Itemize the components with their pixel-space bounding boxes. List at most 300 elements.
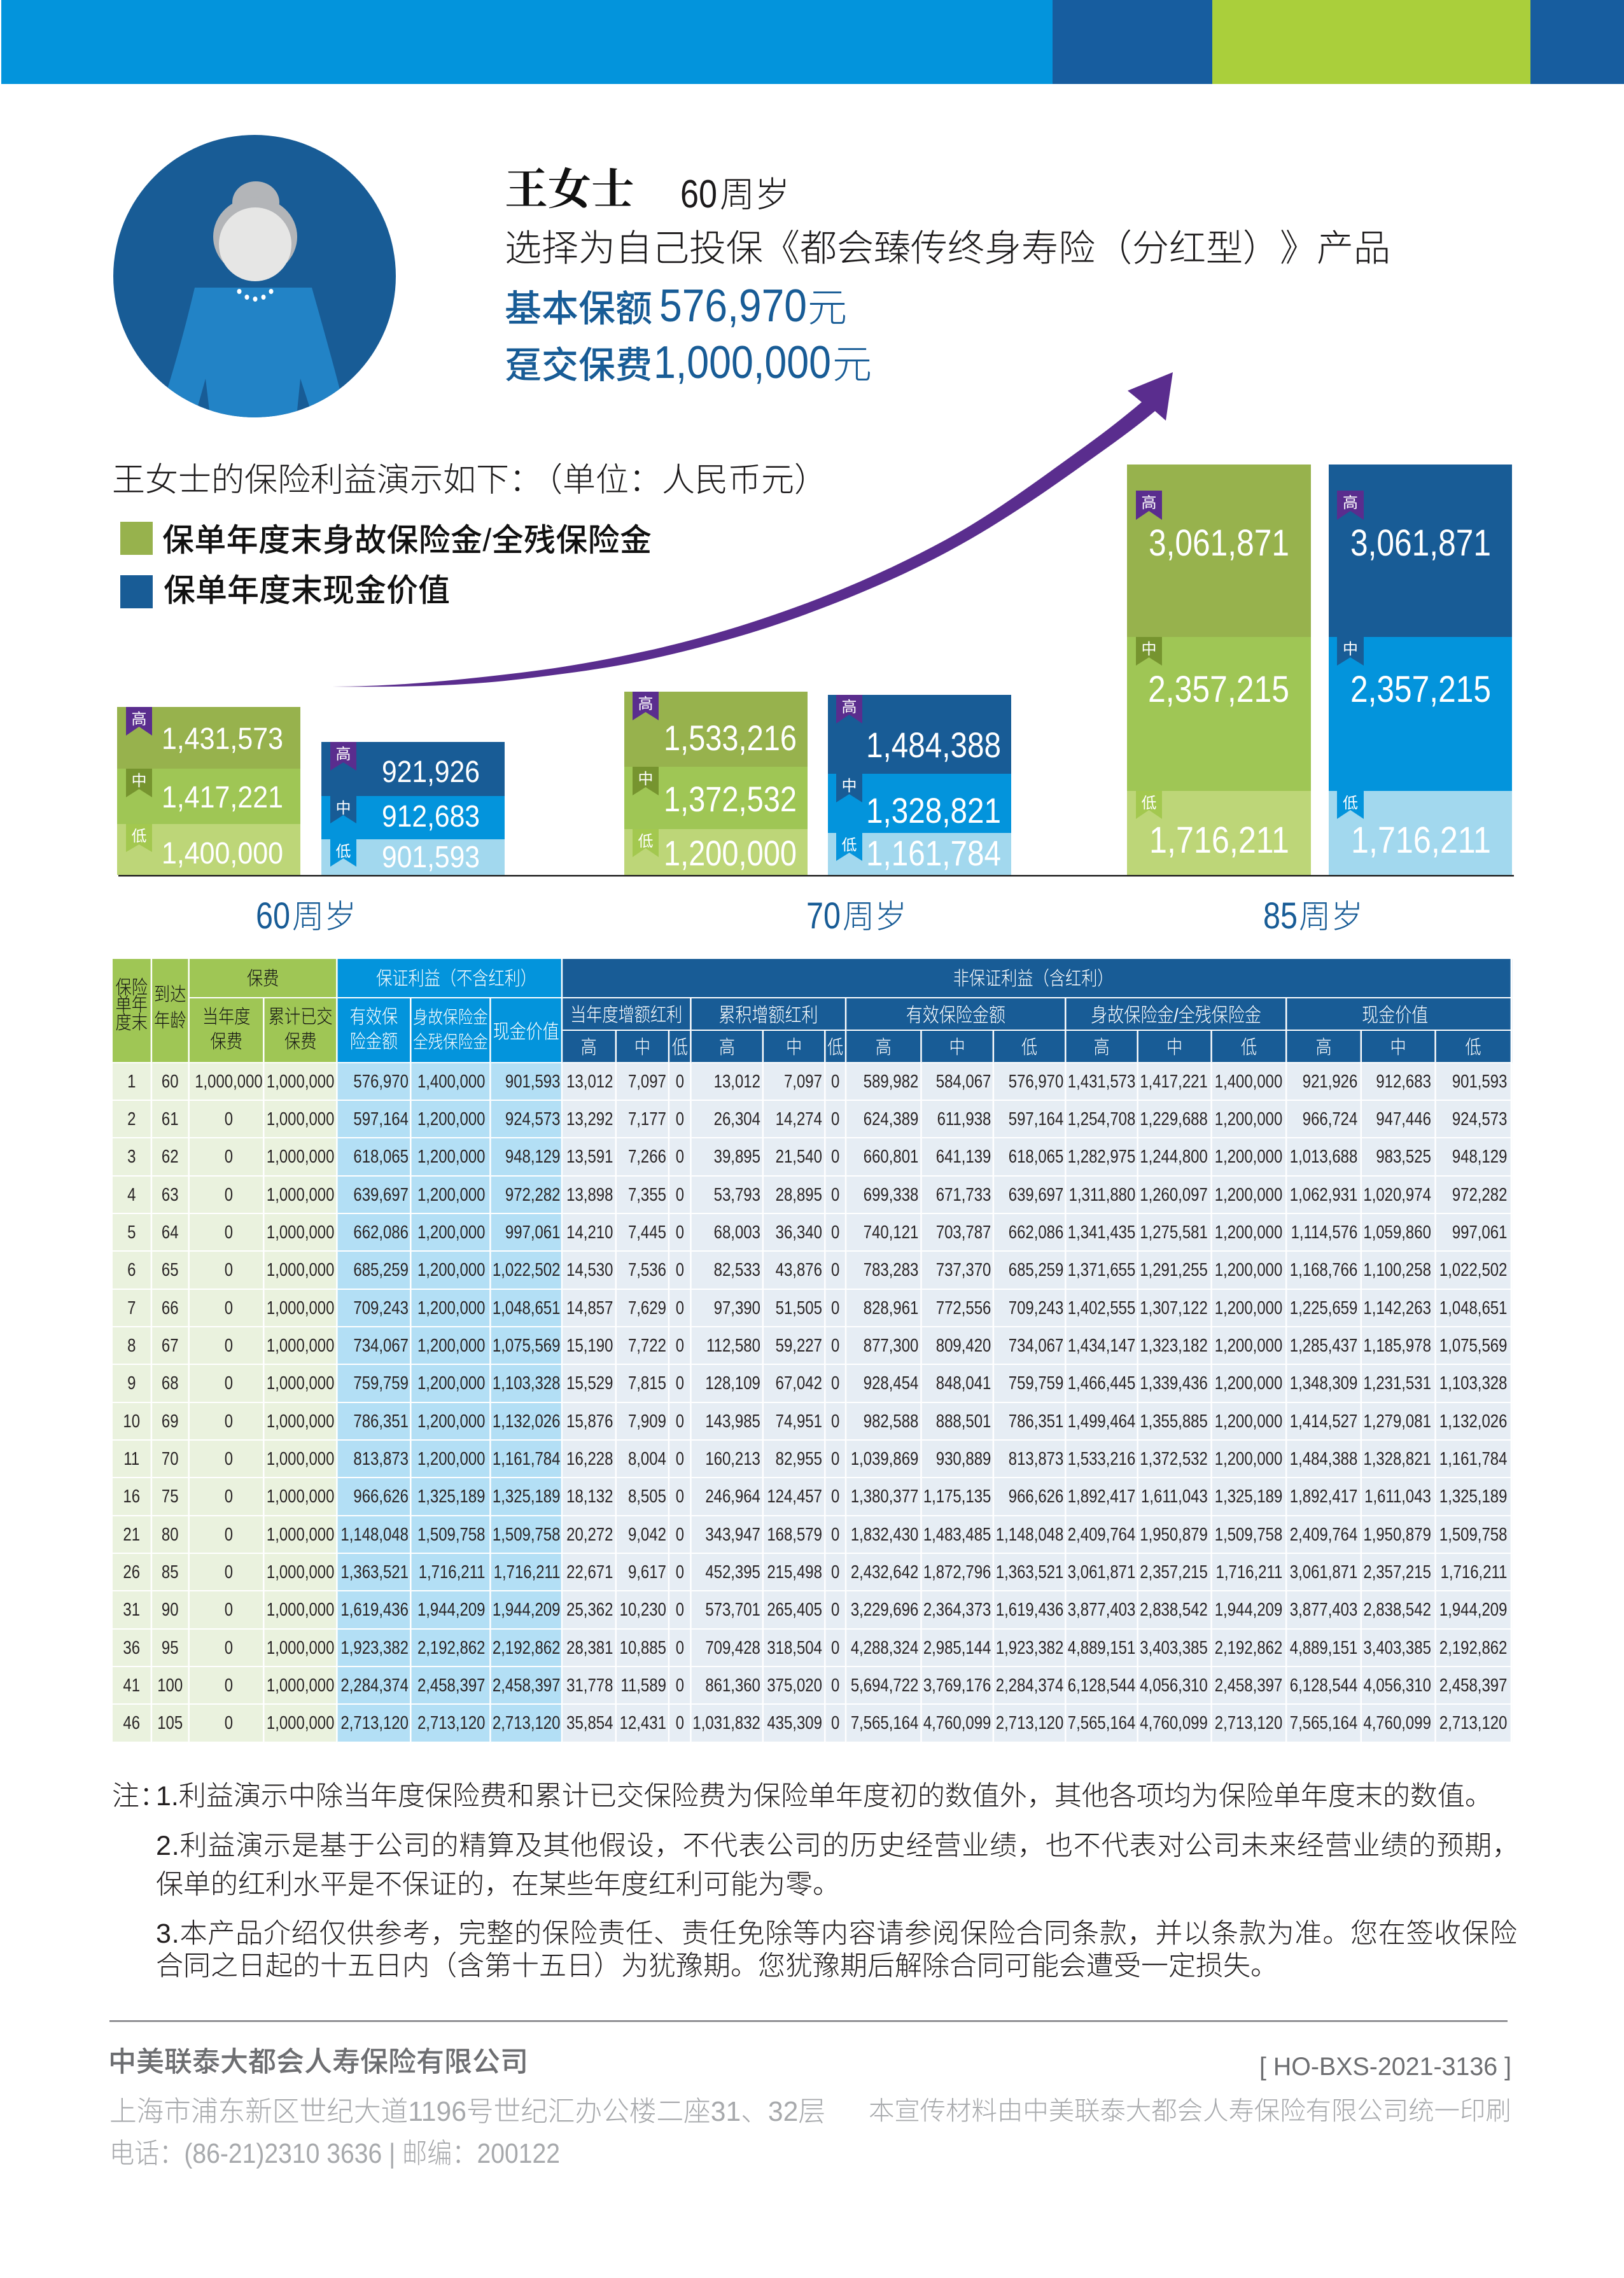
table: benefit illustration: 82,533	[714, 1260, 760, 1280]
table: benefit illustration: 8,505	[628, 1486, 666, 1507]
table: benefit illustration: 2,284,374	[996, 1675, 1063, 1696]
text: basic sum insured: 元	[808, 286, 847, 330]
table: benefit illustration: 到达	[154, 984, 186, 1005]
table: benefit illustration: 597,164	[353, 1109, 409, 1129]
table: benefit illustration: 28,381	[566, 1638, 613, 1658]
table: benefit illustration: 1,200,000	[1215, 1147, 1282, 1167]
table: benefit illustration: 0	[676, 1147, 684, 1167]
table: benefit illustration: 6	[127, 1260, 136, 1280]
table: benefit illustration: 5,694,722	[851, 1675, 918, 1696]
bar: age 60 cash value	[321, 742, 505, 875]
table: benefit illustration: 7,722	[628, 1336, 666, 1356]
table: benefit illustration: 0	[225, 1298, 233, 1318]
table: benefit illustration: 618,065	[1009, 1147, 1063, 1167]
table: benefit illustration: 18,132	[566, 1486, 613, 1507]
table: benefit illustration: 21,540	[776, 1147, 822, 1167]
table: benefit illustration: 2,432,642	[851, 1562, 918, 1583]
table: benefit illustration: 1,509,758	[417, 1525, 485, 1545]
notes	[112, 1781, 1520, 1981]
table: benefit illustration: 1,103,328	[493, 1373, 560, 1394]
table: benefit illustration: 74,951	[776, 1411, 822, 1432]
text: single premium	[505, 337, 872, 388]
table: benefit illustration: 0	[676, 1260, 684, 1280]
table: benefit illustration: 584,067	[936, 1072, 991, 1092]
table: benefit illustration: 保费	[247, 968, 279, 989]
bar: age 85 cash value: 高	[1343, 494, 1358, 512]
arrow: growth curve	[332, 372, 1173, 687]
table: benefit illustration: 1,000,000	[267, 1449, 334, 1469]
table: benefit illustration: 度末	[116, 1012, 148, 1033]
table: benefit illustration: 318,504	[767, 1638, 822, 1658]
table: benefit illustration: 1,325,189	[1215, 1486, 1282, 1507]
table: benefit illustration: 累积增额红利	[718, 1004, 818, 1026]
table: benefit illustration: 0	[225, 1638, 233, 1658]
table: benefit illustration: 险金额	[350, 1031, 398, 1052]
table: benefit illustration: 1,000,000	[267, 1373, 334, 1394]
table: benefit illustration: 997,061	[505, 1222, 560, 1243]
table: benefit illustration: 7,266	[628, 1147, 666, 1167]
table: benefit illustration: 1,100,258	[1363, 1260, 1431, 1280]
table: benefit illustration: 1,509,758	[1439, 1525, 1507, 1545]
text: product selection: 选择为自己投保《都会臻传终身寿险（分红型）》产品	[505, 228, 1390, 269]
table: benefit illustration: 75	[162, 1486, 179, 1507]
table: benefit illustration: 1,611,043	[1364, 1486, 1431, 1507]
table: benefit illustration: 46	[123, 1713, 140, 1733]
table: benefit illustration: 1,892,417	[1068, 1486, 1135, 1507]
table: benefit illustration: 1,020,974	[1363, 1185, 1431, 1205]
table: benefit illustration: 6,128,544	[1068, 1675, 1135, 1696]
axis label: age 85: 周岁	[1299, 898, 1363, 935]
table: benefit illustration: 7,565,164	[1068, 1713, 1135, 1733]
table: benefit illustration: 1,372,532	[1140, 1449, 1208, 1469]
table: benefit illustration: 0	[225, 1449, 233, 1469]
table: benefit illustration: 848,041	[936, 1373, 991, 1394]
table: benefit illustration: 身故保险金	[413, 1007, 488, 1027]
table: benefit illustration: 低	[1241, 1037, 1257, 1058]
bar: age 60 death benefit: 1,400,000	[162, 837, 283, 870]
table: benefit illustration: 709,243	[1009, 1298, 1063, 1318]
table: benefit illustration: 0	[225, 1109, 233, 1129]
table: benefit illustration: 1,311,880	[1069, 1185, 1135, 1205]
heading: benefit illustration: 王女士的保险利益演示如下：	[112, 462, 542, 499]
table: benefit illustration: 4,760,099	[1140, 1713, 1208, 1733]
table: benefit illustration: 105	[157, 1713, 183, 1733]
table: benefit illustration: 4,056,310	[1363, 1675, 1431, 1696]
table: benefit illustration: 143,985	[705, 1411, 760, 1432]
table: benefit illustration: 0	[831, 1600, 839, 1620]
table: benefit illustration: 912,683	[1376, 1072, 1431, 1092]
table: benefit illustration: 1,185,978	[1363, 1336, 1431, 1356]
table: benefit illustration: 31,778	[566, 1675, 613, 1696]
table: benefit illustration: 0	[676, 1222, 684, 1243]
table: benefit illustration: 1,000,000	[267, 1600, 334, 1620]
table: benefit illustration: 1,431,573	[1068, 1072, 1135, 1092]
table: benefit illustration: 3,061,871	[1068, 1562, 1135, 1583]
table: benefit illustration: 7,565,164	[851, 1713, 918, 1733]
table: benefit illustration: 全残保险金	[413, 1032, 488, 1052]
table: benefit illustration: 589,982	[864, 1072, 918, 1092]
table: benefit illustration: 1,279,081	[1363, 1411, 1431, 1432]
table: benefit illustration: 1,414,527	[1290, 1411, 1357, 1432]
table: benefit illustration: 7,629	[628, 1298, 666, 1318]
table: benefit illustration: 67,042	[776, 1373, 822, 1394]
table: benefit illustration: 734,067	[1009, 1336, 1063, 1356]
table: benefit illustration: 671,733	[936, 1185, 991, 1205]
table: benefit illustration: 保险	[116, 977, 148, 998]
table: benefit illustration: 343,947	[705, 1525, 760, 1545]
table: benefit illustration: 100	[157, 1675, 183, 1696]
table: benefit illustration: 2,458,397	[493, 1675, 560, 1696]
table: benefit illustration: 1,355,885	[1140, 1411, 1208, 1432]
table: benefit illustration: 单年	[116, 995, 148, 1016]
table: benefit illustration: 1,944,209	[493, 1600, 560, 1620]
table: benefit illustration: 759,759	[1009, 1373, 1063, 1394]
table: benefit illustration: 68	[162, 1373, 179, 1394]
notes: 合同之日起的十五日内（含第十五日）为犹豫期。您犹豫期后解除合同可能会遭受一定损失。	[156, 1951, 1278, 1981]
table: benefit illustration: 639,697	[353, 1185, 409, 1205]
table: benefit illustration: 3	[127, 1147, 136, 1167]
table: benefit illustration: 2	[127, 1109, 136, 1129]
table: benefit illustration: 11,589	[620, 1675, 666, 1696]
table: benefit illustration: 888,501	[936, 1411, 991, 1432]
footer: company name: 中美联泰大都会人寿保险有限公司	[108, 2046, 528, 2078]
table: benefit illustration: 1,484,388	[1290, 1449, 1357, 1469]
table: benefit illustration: 1,103,328	[1439, 1373, 1507, 1394]
table: benefit illustration: 12,431	[620, 1713, 666, 1733]
table: benefit illustration: 0	[676, 1638, 684, 1658]
table: benefit illustration: 非保证利益（含红利）	[953, 968, 1114, 989]
table: benefit illustration: 928,454	[864, 1373, 918, 1394]
table: benefit illustration: 1,000,000	[267, 1147, 334, 1167]
table: benefit illustration: 1,161,784	[1439, 1449, 1507, 1469]
table: benefit illustration: 7,909	[628, 1411, 666, 1432]
table: benefit illustration: 20,272	[566, 1525, 613, 1545]
table: benefit illustration: 709,243	[353, 1298, 409, 1318]
table: benefit illustration: 21	[123, 1525, 140, 1545]
heading: benefit illustration: 人民币元）	[662, 462, 827, 499]
table: benefit illustration: 保费	[284, 1031, 316, 1052]
table: benefit illustration: 0	[676, 1562, 684, 1583]
table: benefit illustration: 9	[127, 1373, 136, 1394]
table: benefit illustration: 1,000,000	[267, 1525, 334, 1545]
table: benefit illustration: 25,362	[566, 1600, 613, 1620]
table: benefit illustration: 0	[225, 1675, 233, 1696]
table: benefit illustration: 0	[676, 1336, 684, 1356]
table: benefit illustration: 7,565,164	[1290, 1713, 1357, 1733]
table: benefit illustration: 7,355	[628, 1185, 666, 1205]
table: benefit illustration: 1,611,043	[1141, 1486, 1208, 1507]
table: benefit illustration: 2,284,374	[340, 1675, 409, 1696]
table: benefit illustration: 0	[676, 1072, 684, 1092]
bar: age 85 cash value	[1329, 465, 1512, 876]
table: benefit illustration: 265,405	[767, 1600, 822, 1620]
table: benefit illustration: 2,985,144	[923, 1638, 991, 1658]
table: benefit illustration: 90	[162, 1600, 179, 1620]
table: benefit illustration: 16,228	[566, 1449, 613, 1469]
table: benefit illustration: 14,210	[566, 1222, 613, 1243]
table: benefit illustration: 877,300	[864, 1336, 918, 1356]
table: benefit illustration: 1,039,869	[851, 1449, 918, 1469]
table: benefit illustration: 1,380,377	[851, 1486, 918, 1507]
table: benefit illustration: 53,793	[714, 1185, 760, 1205]
table: benefit illustration: 1,200,000	[1215, 1109, 1282, 1129]
table: benefit illustration: 15,190	[566, 1336, 613, 1356]
bar: age 70 cash value	[828, 695, 1011, 875]
table: benefit illustration: 62	[162, 1147, 179, 1167]
table: benefit illustration: 10	[123, 1411, 140, 1432]
table: benefit illustration: 15,876	[566, 1411, 613, 1432]
table: benefit illustration: 10,230	[620, 1600, 666, 1620]
table: benefit illustration: 1,200,000	[1215, 1185, 1282, 1205]
table: benefit illustration: 1,339,436	[1140, 1373, 1208, 1394]
table: benefit illustration: 662,086	[353, 1222, 409, 1243]
table: benefit illustration: 0	[831, 1713, 839, 1733]
notes: 保单的红利水平是不保证的，在某些年度红利可能为零。	[156, 1869, 840, 1900]
bar: age 85 cash value: 1,716,211	[1351, 820, 1491, 861]
table: benefit illustration: 1,923,382	[340, 1638, 409, 1658]
table: benefit illustration: 639,697	[1009, 1185, 1063, 1205]
table: benefit illustration: 1,363,521	[996, 1562, 1063, 1583]
bar: age 60 death benefit: 1,417,221	[162, 781, 283, 814]
table: benefit illustration: 809,420	[936, 1336, 991, 1356]
table: benefit illustration: 930,889	[936, 1449, 991, 1469]
table: benefit illustration: 2,458,397	[1215, 1675, 1282, 1696]
table: benefit illustration: 13,898	[566, 1185, 613, 1205]
table: benefit illustration: 3,877,403	[1290, 1600, 1357, 1620]
table: benefit illustration: 786,351	[353, 1411, 409, 1432]
table: benefit illustration: 0	[831, 1298, 839, 1318]
bar: age 85 death benefit: 中	[1142, 641, 1157, 658]
table: benefit illustration: 573,701	[705, 1600, 760, 1620]
axis label: age 60	[256, 895, 356, 937]
table: benefit illustration: 36,340	[776, 1222, 822, 1243]
table: benefit illustration: 0	[676, 1486, 684, 1507]
table: benefit illustration: 中	[1390, 1037, 1406, 1058]
table: benefit illustration: 43,876	[776, 1260, 822, 1280]
table: benefit illustration: 3,403,385	[1363, 1638, 1431, 1658]
table: benefit illustration: 1,716,211	[494, 1562, 560, 1583]
table: benefit illustration: 0	[831, 1562, 839, 1583]
table: benefit illustration: 4,288,324	[851, 1638, 918, 1658]
table: benefit illustration: 1,325,189	[493, 1486, 560, 1507]
table: benefit illustration: 0	[831, 1411, 839, 1432]
bar: age 85 death benefit: 低	[1142, 795, 1157, 812]
table: benefit illustration: 1,200,000	[1215, 1373, 1282, 1394]
table: benefit illustration: 1,872,796	[923, 1562, 991, 1583]
table: benefit illustration: 861,360	[705, 1675, 760, 1696]
table: benefit illustration: 4,760,099	[923, 1713, 991, 1733]
table: benefit illustration: 3,229,696	[851, 1600, 918, 1620]
table: benefit illustration: 1,499,464	[1068, 1411, 1135, 1432]
table: benefit illustration: 921,926	[1303, 1072, 1357, 1092]
table: benefit illustration: 1,142,263	[1363, 1298, 1431, 1318]
table: benefit illustration: 1,000,000	[267, 1298, 334, 1318]
table: benefit illustration: 13,012	[566, 1072, 613, 1092]
table: benefit illustration: 70	[162, 1449, 179, 1469]
table: benefit illustration: 身故保险金/全残保险金	[1091, 1004, 1261, 1026]
table: benefit illustration: 1,000,000	[267, 1713, 334, 1733]
table: benefit illustration: 0	[831, 1260, 839, 1280]
table: benefit illustration: 51,505	[776, 1298, 822, 1318]
axis label: age 70	[806, 895, 907, 937]
bar: age 70 cash value: 中	[841, 778, 857, 795]
bar: age 60 cash value: 高	[336, 746, 351, 763]
table: benefit illustration: 1,000,000	[267, 1675, 334, 1696]
table: benefit illustration: 660,801	[864, 1147, 918, 1167]
footer: print statement: 本宣传材料由中美联泰大都会人寿保险有限公司统一印刷	[869, 2096, 1511, 2125]
table: benefit illustration: 有效保险金额	[906, 1004, 1005, 1026]
table: benefit illustration: 597,164	[1009, 1109, 1063, 1129]
table: benefit illustration: 947,446	[1376, 1109, 1431, 1129]
table: benefit illustration: 11	[123, 1449, 139, 1469]
table: benefit illustration: 4,056,310	[1140, 1675, 1208, 1696]
table: benefit illustration: 0	[225, 1713, 233, 1733]
table: benefit illustration: 1,175,135	[923, 1486, 991, 1507]
table: benefit illustration: 2,838,542	[1140, 1600, 1208, 1620]
table: benefit illustration: 1,000,000	[267, 1185, 334, 1205]
bar: age 70 cash value: 1,484,388	[866, 725, 1001, 765]
table: benefit illustration: 1,619,436	[340, 1600, 409, 1620]
table: benefit illustration: 2,192,862	[417, 1638, 485, 1658]
table: benefit illustration: 当年度增额红利	[570, 1004, 682, 1026]
table: benefit illustration: 13,591	[566, 1147, 613, 1167]
table: benefit illustration: 0	[831, 1072, 839, 1092]
table: benefit illustration: 现金价值	[1362, 1004, 1428, 1026]
bar: age 60 cash value: 中	[336, 800, 351, 817]
table: benefit illustration: 709,428	[705, 1638, 760, 1658]
table: benefit illustration: 60	[162, 1072, 179, 1092]
table: benefit illustration: 1,716,211	[1216, 1562, 1282, 1583]
table: benefit illustration: 1,132,026	[493, 1411, 560, 1432]
table: benefit illustration: 924,573	[1452, 1109, 1507, 1129]
legend: death benefit: 保单年度末身故保险金/全残保险金	[162, 522, 652, 558]
table: benefit illustration: 1,533,216	[1068, 1449, 1135, 1469]
table: benefit illustration: 982,588	[864, 1411, 918, 1432]
table: benefit illustration: 1,168,766	[1290, 1260, 1357, 1280]
table: benefit illustration: 0	[676, 1675, 684, 1696]
table: benefit illustration: 中	[949, 1037, 965, 1058]
table: benefit illustration: 4,889,151	[1290, 1638, 1357, 1658]
table: benefit illustration: 1,402,555	[1068, 1298, 1135, 1318]
table: benefit illustration: 年龄	[154, 1010, 186, 1031]
table: benefit illustration: 0	[831, 1185, 839, 1205]
table: benefit illustration: 低	[1466, 1037, 1481, 1058]
table: benefit illustration: 685,259	[353, 1260, 409, 1280]
table: benefit illustration: 累计已交	[269, 1007, 333, 1028]
table: benefit illustration: 1,923,382	[996, 1638, 1063, 1658]
bar: age 60 cash value: 912,683	[382, 800, 480, 834]
table: benefit illustration: 1,200,000	[417, 1260, 485, 1280]
table: benefit illustration: 1,254,708	[1068, 1109, 1135, 1129]
axis label: age 70: 70	[806, 895, 841, 937]
table: benefit illustration: 1,000,000	[195, 1072, 263, 1092]
bar: age 85 death benefit: 高	[1142, 494, 1157, 512]
bar: age 85 death benefit: 2,357,215	[1148, 669, 1289, 710]
table: benefit illustration: 0	[225, 1222, 233, 1243]
notes: 注：	[112, 1781, 167, 1812]
table: benefit illustration: 4,760,099	[1363, 1713, 1431, 1733]
table: benefit illustration: 1,200,000	[1215, 1260, 1282, 1280]
table: benefit illustration: 624,389	[864, 1109, 918, 1129]
table: benefit illustration: 2,713,120	[417, 1713, 485, 1733]
table: benefit illustration: 948,129	[1452, 1147, 1507, 1167]
table: benefit illustration: 1,013,688	[1290, 1147, 1357, 1167]
bar: age 60 cash value: 901,593	[382, 841, 480, 874]
table: benefit illustration: 0	[831, 1525, 839, 1545]
table: benefit illustration: 1,132,026	[1439, 1411, 1507, 1432]
table: benefit illustration: 41	[123, 1675, 140, 1696]
table: benefit illustration: 948,129	[505, 1147, 560, 1167]
table: benefit illustration: 中	[634, 1037, 650, 1058]
table: benefit illustration: 14,530	[566, 1260, 613, 1280]
footer: document code: [ HO-BXS-2021-3136 ]	[1259, 2053, 1511, 2081]
table: benefit illustration: 1,000,000	[267, 1336, 334, 1356]
table: benefit illustration: 0	[831, 1486, 839, 1507]
heading: customer name and age: 王女士	[505, 165, 634, 214]
table: benefit illustration: 1,000,000	[267, 1486, 334, 1507]
table: benefit illustration: 2,713,120	[493, 1713, 560, 1733]
bar: age 60 death benefit: 低	[131, 828, 146, 845]
table: benefit illustration: 1,244,800	[1140, 1147, 1208, 1167]
table: benefit illustration: 1,417,221	[1140, 1072, 1208, 1092]
table: benefit illustration: 1,022,502	[1439, 1260, 1507, 1280]
table: benefit illustration: 0	[676, 1185, 684, 1205]
table: benefit illustration: 0	[225, 1486, 233, 1507]
table: benefit illustration: 1,509,758	[493, 1525, 560, 1545]
table: benefit illustration: 1,950,879	[1363, 1525, 1431, 1545]
table: benefit illustration: 2,458,397	[1439, 1675, 1507, 1696]
table: benefit illustration: 1,022,502	[493, 1260, 560, 1280]
table: benefit illustration: 0	[676, 1411, 684, 1432]
table: benefit illustration: 中	[1166, 1037, 1182, 1058]
table: benefit illustration: 5	[127, 1222, 136, 1243]
table: benefit illustration: 1,509,758	[1215, 1525, 1282, 1545]
table: benefit illustration: 1,200,000	[1215, 1222, 1282, 1243]
table: benefit illustration: 828,961	[864, 1298, 918, 1318]
table: benefit illustration: 452,395	[705, 1562, 760, 1583]
table: benefit illustration: 低	[672, 1037, 688, 1058]
table: benefit illustration: 924,573	[505, 1109, 560, 1129]
table: benefit illustration: 6,128,544	[1290, 1675, 1357, 1696]
top colour band	[1, 0, 1624, 84]
table: benefit illustration: 有效保	[350, 1007, 398, 1028]
table: benefit illustration: 699,338	[864, 1185, 918, 1205]
table: benefit illustration: 901,593	[505, 1072, 560, 1092]
table: benefit illustration: 1,200,000	[417, 1411, 485, 1432]
table: benefit illustration: 1,944,209	[1439, 1600, 1507, 1620]
table: benefit illustration: 0	[225, 1600, 233, 1620]
table: benefit illustration: 4	[127, 1185, 136, 1205]
table: benefit illustration: 1,716,211	[1441, 1562, 1507, 1583]
table: benefit illustration: 1,231,531	[1363, 1373, 1431, 1394]
table: benefit illustration: 1,031,832	[692, 1713, 760, 1733]
table: benefit illustration: 997,061	[1452, 1222, 1507, 1243]
axis label: age 60: 60	[256, 895, 290, 937]
table: benefit illustration: 7	[127, 1298, 136, 1318]
axis label: age 85	[1263, 895, 1363, 937]
table: benefit illustration: 低	[827, 1037, 843, 1058]
table: benefit illustration: 26,304	[714, 1109, 760, 1129]
table: benefit illustration: 7,445	[628, 1222, 666, 1243]
icon: woman portrait	[113, 135, 396, 426]
table: benefit illustration: 2,713,120	[996, 1713, 1063, 1733]
bar: age 60 death benefit: 高	[131, 711, 146, 728]
table: benefit illustration: 215,498	[767, 1562, 822, 1583]
table: benefit illustration: 966,724	[1303, 1109, 1357, 1129]
table: benefit illustration: 0	[676, 1373, 684, 1394]
table: benefit illustration: 0	[676, 1525, 684, 1545]
table: benefit illustration: 14,857	[566, 1298, 613, 1318]
